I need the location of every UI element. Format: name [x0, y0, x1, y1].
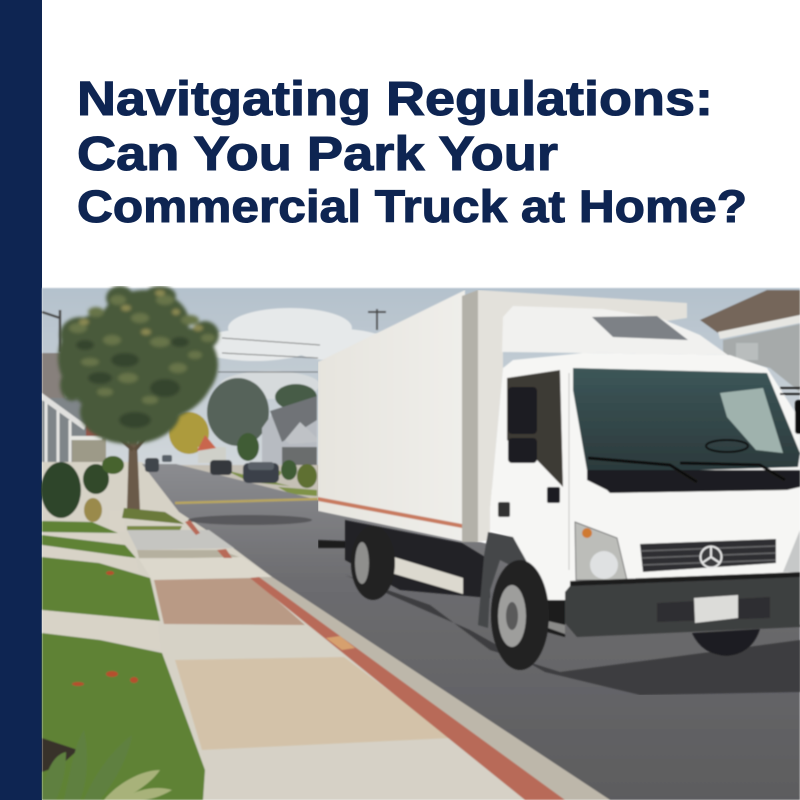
indicator — [582, 528, 592, 538]
mulch — [42, 738, 78, 772]
windshield reflection — [720, 388, 783, 453]
clouds — [195, 308, 390, 399]
cab step — [535, 618, 565, 634]
headlight lens — [590, 551, 618, 579]
truck shadow — [345, 575, 800, 695]
right mirror arm — [780, 388, 800, 434]
bumper vent — [657, 597, 770, 622]
far front wheel — [692, 629, 760, 656]
left navy sidebar — [0, 0, 42, 800]
street photo scene — [41, 286, 800, 800]
title — [77, 73, 747, 232]
title: Commercial Truck at Home? — [77, 181, 747, 232]
utility pole and wires — [42, 309, 386, 372]
far lawns — [225, 470, 317, 496]
title: Can You Park Your — [77, 128, 558, 181]
lawns — [42, 508, 205, 800]
far side ground — [175, 465, 320, 505]
left house — [42, 353, 106, 468]
license plate — [694, 595, 738, 623]
wheel arch — [478, 532, 537, 628]
cargo box side — [318, 290, 465, 542]
hood shadow line — [570, 572, 800, 588]
right house — [700, 290, 800, 392]
far curb — [222, 480, 318, 501]
large street tree — [58, 286, 219, 510]
door handle — [547, 487, 560, 503]
star logo — [700, 546, 722, 568]
steering wheel — [706, 440, 748, 452]
bumper — [565, 577, 800, 637]
fallen leaves — [72, 571, 138, 686]
front wheel — [491, 560, 549, 670]
side door window — [507, 370, 563, 487]
bushes — [41, 456, 317, 522]
cargo corner post — [462, 290, 478, 542]
sky — [42, 288, 800, 488]
black cowl — [587, 470, 800, 493]
wing mirrors — [508, 387, 537, 463]
dark under-cab — [537, 600, 565, 637]
wipers — [588, 458, 785, 482]
sidewalk slabs — [127, 530, 532, 800]
title: Navitgating Regulations: — [77, 73, 713, 126]
cargo box front — [478, 290, 687, 542]
chassis — [345, 520, 490, 598]
red brick curb strip — [250, 577, 565, 800]
grey house mid-street — [262, 396, 317, 472]
cab roof fairing — [502, 306, 728, 355]
foreground plant — [42, 730, 172, 800]
side step guard — [381, 553, 463, 594]
background trees — [169, 378, 317, 461]
commercial box truck — [318, 290, 800, 695]
headlight — [575, 522, 627, 580]
road — [142, 464, 800, 800]
side latch — [498, 502, 510, 517]
right headlight — [783, 530, 800, 572]
concrete curb — [259, 577, 610, 800]
rear bumper bar — [318, 540, 345, 548]
door seam — [568, 373, 570, 570]
small brick patches — [185, 520, 355, 650]
orange stripe — [318, 497, 462, 528]
windshield — [573, 368, 800, 473]
left ground base — [42, 462, 620, 800]
parked cars — [145, 455, 279, 483]
front yard pale paths — [42, 510, 161, 650]
roof vent — [592, 316, 688, 340]
cab body — [490, 353, 800, 605]
grille bars — [641, 546, 776, 565]
road markings — [175, 499, 318, 503]
road shadow — [188, 515, 312, 525]
front grille — [640, 539, 776, 572]
rear wheel — [351, 526, 395, 600]
red roof house — [197, 435, 226, 463]
